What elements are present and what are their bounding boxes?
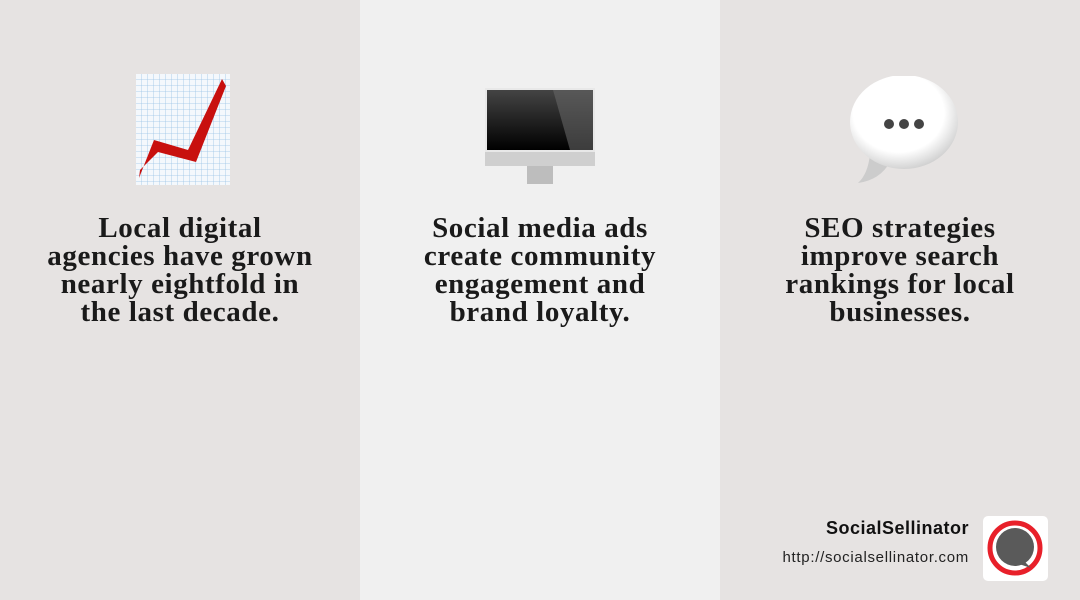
panel: right	[720, 0, 1080, 600]
text: middle: create community	[424, 240, 656, 272]
text: middle: brand loyalty.	[450, 296, 630, 328]
text: left: Local digital	[98, 212, 262, 244]
icon: chart	[136, 74, 230, 185]
text: middle: Social media ads	[432, 212, 648, 244]
icon: monitor	[485, 90, 595, 184]
text: middle: engagement and	[435, 268, 645, 300]
text: middle	[424, 212, 656, 328]
logo	[983, 516, 1048, 581]
text: right: businesses.	[829, 296, 971, 328]
text: right	[785, 212, 1015, 328]
panel: middle	[360, 0, 720, 600]
text: left: nearly eightfold in	[61, 268, 299, 300]
text: left: agencies have grown	[47, 240, 313, 272]
text: left: the last decade.	[81, 296, 279, 328]
icon: speech bubble	[850, 76, 958, 183]
text: left	[47, 212, 313, 328]
panel: left	[0, 0, 360, 600]
brand name: SocialSellinator	[826, 518, 969, 538]
text: right: rankings for local	[785, 268, 1015, 300]
text: right: improve search	[801, 240, 999, 272]
text: right: SEO strategies	[804, 212, 996, 244]
brand url: http://socialsellinator.com	[783, 549, 969, 566]
